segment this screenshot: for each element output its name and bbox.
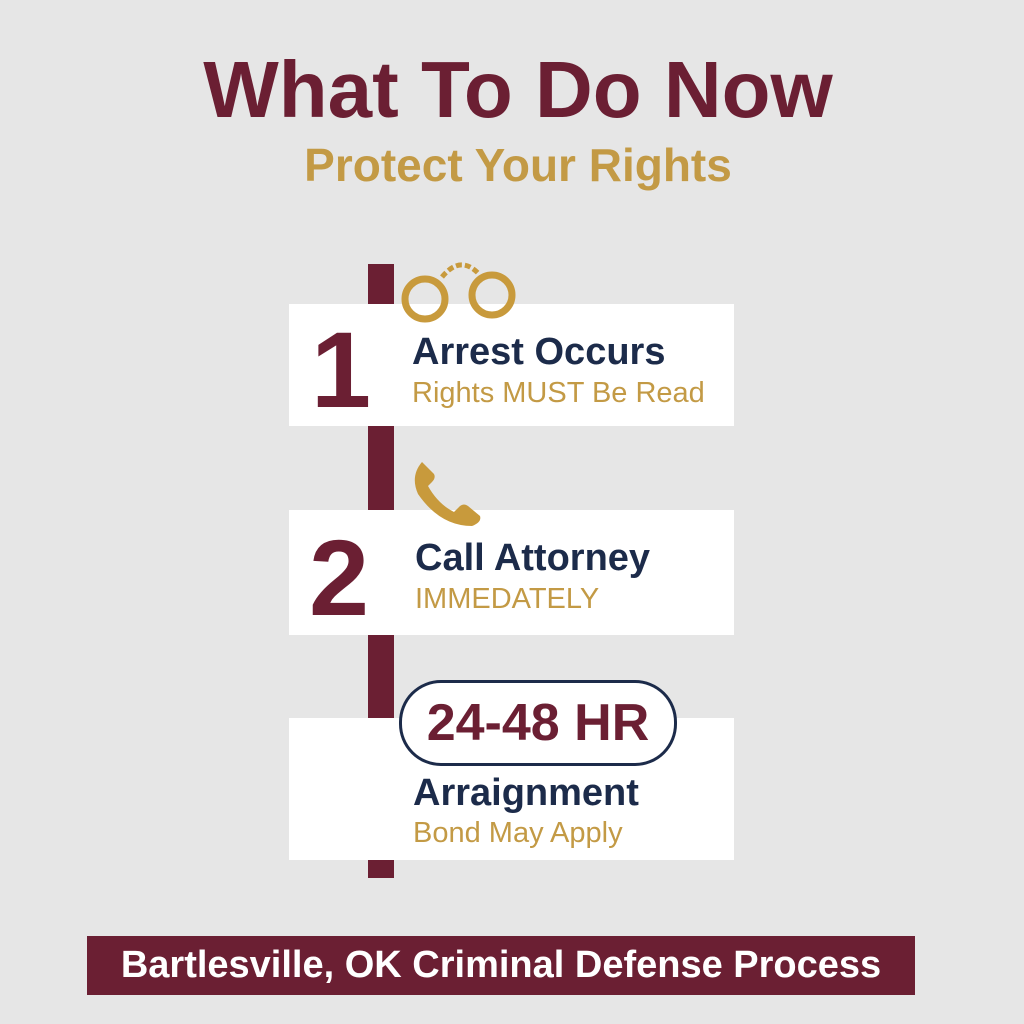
- heading: Arraignment: [413, 772, 639, 814]
- footer banner: Bartlesville, OK Criminal Defense Process: [121, 944, 881, 986]
- heading: Call Attorney: [415, 537, 650, 579]
- subtext: Rights MUST Be Read: [412, 377, 705, 409]
- subtitle: Protect Your Rights: [304, 139, 732, 191]
- pill: 24-48 HR: 24-48 HR: [427, 694, 649, 752]
- card 3: arraignment: [289, 718, 734, 860]
- icon: handcuffs: [402, 262, 516, 322]
- heading: Arrest Occurs: [412, 331, 665, 373]
- timeline bar: [368, 264, 394, 878]
- number 1: 1: [311, 309, 371, 430]
- card 2: call: [289, 510, 734, 635]
- subtext: Bond May Apply: [413, 817, 623, 849]
- number 2: 2: [309, 517, 369, 638]
- title: What To Do Now: [203, 45, 833, 134]
- pill: 24-48 HR: [399, 680, 677, 766]
- card 1: arrest: [289, 304, 734, 426]
- footer banner: [87, 936, 915, 995]
- subtext: IMMEDATELY: [415, 583, 599, 615]
- icon: phone: [414, 462, 480, 526]
